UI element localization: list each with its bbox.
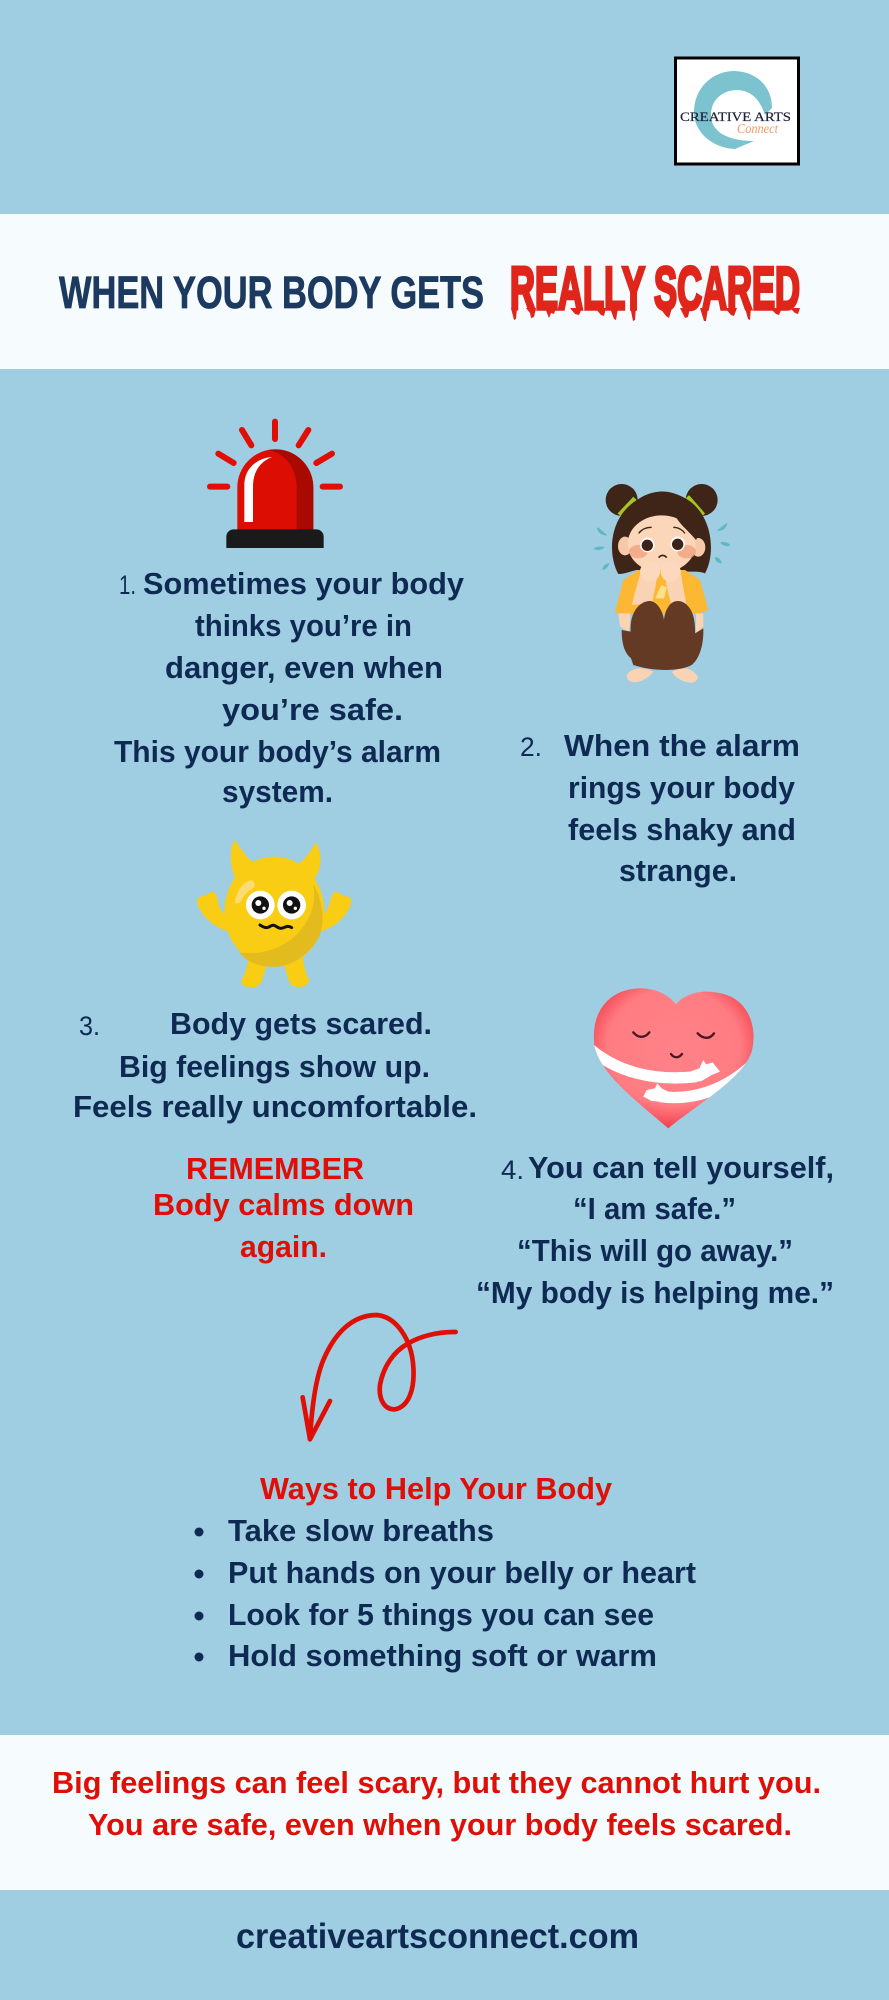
step 2 text: rings your body — [568, 771, 795, 805]
list heading: Ways to Help Your Body — [260, 1472, 612, 1506]
list items: Hold something soft or warm — [228, 1639, 657, 1673]
ways to help list — [194, 1472, 696, 1673]
remember callout — [153, 1152, 414, 1264]
list items: Look for 5 things you can see — [228, 1598, 654, 1632]
remember callout: Body calms down — [153, 1188, 414, 1222]
step 3 text — [73, 1007, 477, 1124]
step 1 text — [114, 567, 464, 809]
list items: Put hands on your belly or heart — [228, 1556, 696, 1590]
step 4 text: “I am safe.” — [573, 1192, 736, 1226]
step 1 text: danger, even when — [165, 651, 443, 685]
step 1 text: 1. — [119, 570, 136, 600]
title: when your body gets: WHEN YOUR BODY GETS — [59, 267, 484, 318]
logo script: Connect — [737, 122, 779, 137]
step 1 text: thinks you’re in — [195, 609, 412, 643]
closing message: Big feelings can feel scary, but they cannot hurt you. — [52, 1766, 821, 1800]
remember callout: REMEMBER — [186, 1152, 364, 1186]
closing message: You are safe, even when your body feels scared. — [88, 1808, 792, 1842]
step 4 text: “This will go away.” — [517, 1234, 793, 1268]
list items: Take slow breaths — [228, 1514, 494, 1548]
list items — [194, 1514, 696, 1673]
step 4 text: “My body is helping me.” — [476, 1276, 834, 1310]
step 3 text: Feels really uncomfortable. — [73, 1090, 477, 1124]
step 2 text — [520, 729, 800, 888]
icon: yellow monster — [197, 840, 352, 987]
logo — [676, 58, 798, 164]
step 3 text: Big feelings show up. — [119, 1050, 430, 1084]
closing message — [52, 1766, 821, 1842]
remember callout: again. — [240, 1230, 327, 1264]
website url: creativeartsconnect.com — [236, 1917, 639, 1956]
step 4 text: You can tell yourself, — [528, 1151, 834, 1185]
logo swoosh — [694, 71, 772, 149]
step 2 text: strange. — [619, 854, 737, 888]
icon: heart hugging itself — [590, 988, 755, 1128]
step 2 text: feels shaky and — [568, 813, 796, 847]
step 2 text: When the alarm — [564, 729, 800, 763]
step 1 text: Sometimes your body — [143, 567, 464, 601]
step 4 text: 4. — [501, 1155, 524, 1185]
step 1 text: system. — [222, 775, 333, 809]
step 3 text: Body gets scared. — [170, 1007, 432, 1041]
step 2 text: 2. — [520, 732, 542, 762]
arrow: hand-drawn loop — [303, 1315, 456, 1439]
icon: red alarm siren — [210, 422, 340, 548]
step 1 text: This your body’s alarm — [114, 735, 441, 769]
step 3 text: 3. — [79, 1011, 100, 1041]
logo wordmark: CREATIVE ARTS — [680, 110, 791, 124]
closing message band — [0, 1735, 889, 1890]
step 1 text: you’re safe. — [222, 693, 403, 727]
title band — [0, 214, 889, 369]
step 4 text — [476, 1151, 834, 1310]
icon: scared girl — [593, 484, 730, 683]
